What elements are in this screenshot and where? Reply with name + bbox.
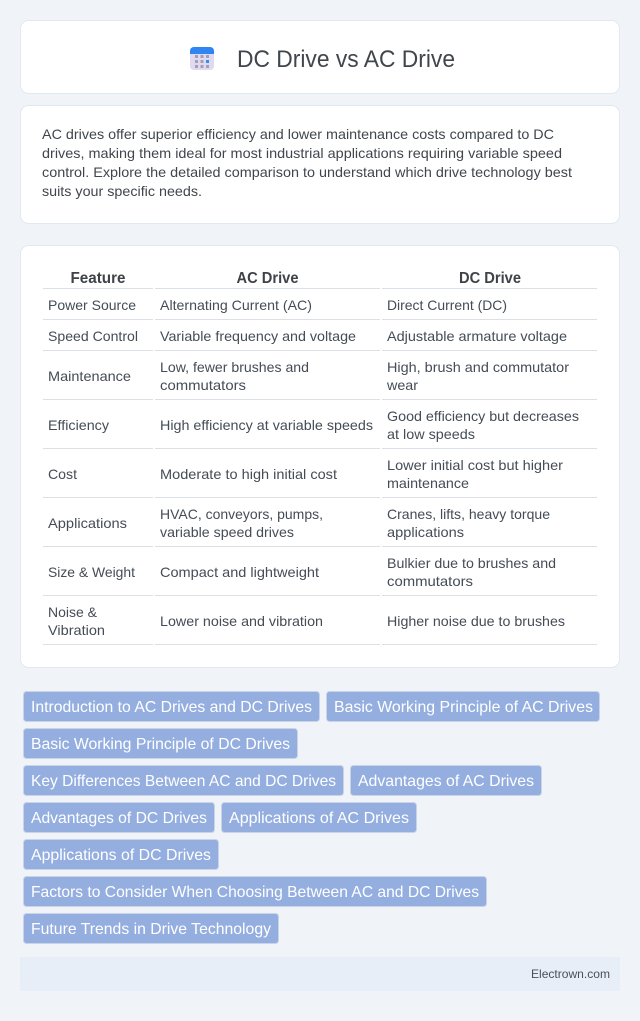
row: size and weight: Compact and lightweight: [160, 564, 319, 580]
row: maintenance: High, brush and commutator: [387, 359, 569, 375]
tag: Applications of AC Drives: [229, 810, 409, 827]
tag: Advantages of DC Drives: [31, 810, 207, 827]
row: efficiency: High efficiency at variable speeds: [160, 417, 373, 433]
row: speed control: Speed Control: [48, 328, 138, 344]
tag: Factors to Consider When Choosing Between AC and DC Drives: [31, 884, 479, 901]
tag: [24, 692, 320, 722]
icon: calendar grid: [190, 47, 214, 70]
panel: intro text: drives, making them ideal for most industrial applications requiring variable speed: [42, 145, 562, 161]
tag: [326, 692, 600, 722]
row: maintenance: wear: [386, 377, 418, 393]
tag: [24, 914, 278, 944]
tag: [24, 728, 298, 758]
row: applications: Applications: [48, 515, 127, 531]
row: applications: [48, 506, 550, 540]
row: noise and vibration: Vibration: [48, 622, 105, 638]
row: cost: Lower initial cost but higher: [387, 457, 563, 473]
tag: Key Differences Between AC and DC Drives: [31, 773, 336, 790]
footer: [20, 957, 620, 991]
row: noise and vibration: [48, 604, 565, 638]
table header: DC Drive: [459, 270, 521, 287]
row: applications: Cranes, lifts, heavy torque: [387, 506, 550, 522]
row: efficiency: [48, 408, 579, 442]
row: size and weight: Bulkier due to brushes and: [387, 555, 556, 571]
row: cost: maintenance: [387, 475, 469, 491]
row: noise and vibration: Lower noise and vibration: [160, 613, 323, 629]
footer: Electrown.com: [531, 967, 610, 981]
tag: Applications of DC Drives: [31, 847, 211, 864]
row: efficiency: Efficiency: [48, 417, 109, 433]
panel: intro text: [20, 106, 620, 224]
tag: Introduction to AC Drives and DC Drives: [31, 699, 312, 716]
panel: intro text: control. Explore the detailed comparison to understand which drive technology best: [42, 164, 572, 180]
tag: [24, 876, 486, 906]
panel: intro text: AC drives offer superior efficiency and lower maintenance costs compared to DC: [42, 126, 554, 142]
row: applications: applications: [387, 524, 464, 540]
table header: AC Drive: [236, 270, 299, 287]
row: size and weight: commutators: [387, 573, 473, 589]
row: cost: [48, 457, 563, 491]
row: cost: Moderate to high initial cost: [160, 466, 337, 482]
tag: Future Trends in Drive Technology: [31, 921, 271, 938]
tag: Basic Working Principle of AC Drives: [334, 699, 593, 716]
row: noise and vibration: Higher noise due to brushes: [387, 613, 565, 629]
row: speed control: [48, 328, 567, 344]
table header: Feature: [70, 270, 126, 287]
row: efficiency: Good efficiency but decreases: [387, 408, 579, 424]
row: speed control: Adjustable armature voltage: [387, 328, 567, 344]
row: maintenance: Low, fewer brushes and: [160, 359, 309, 375]
row: maintenance: commutators: [160, 377, 246, 393]
panel: comparison table: [20, 246, 620, 668]
tag: [222, 802, 416, 832]
row: noise and vibration: Noise &: [48, 604, 98, 620]
row: applications: HVAC, conveyors, pumps,: [160, 506, 323, 522]
panel: header: [20, 20, 620, 94]
row: maintenance: Maintenance: [48, 368, 131, 384]
row: applications: variable speed drives: [160, 524, 294, 540]
row: maintenance: [48, 359, 569, 393]
row: power source: Direct Current (DC): [387, 297, 507, 313]
row: power source: Alternating Current (AC): [160, 297, 312, 313]
title: DC Drive vs AC Drive: [237, 46, 455, 73]
tag: Advantages of AC Drives: [358, 773, 534, 790]
row: power source: Power Source: [48, 297, 136, 313]
row: size and weight: Size & Weight: [48, 564, 135, 580]
row: power source: [48, 297, 507, 313]
tag: [24, 802, 214, 832]
row: cost: Cost: [48, 466, 77, 482]
row: speed control: Variable frequency and voltage: [160, 328, 356, 344]
tag: [24, 840, 218, 870]
row: efficiency: at low speeds: [387, 426, 475, 442]
panel: topic tags: [24, 692, 600, 944]
row: size and weight: [48, 555, 556, 589]
tag: [350, 766, 542, 796]
panel: intro text: suits your specific needs.: [42, 183, 202, 199]
tag: [24, 766, 344, 796]
table header: [70, 270, 521, 287]
tag: Basic Working Principle of DC Drives: [31, 736, 290, 753]
